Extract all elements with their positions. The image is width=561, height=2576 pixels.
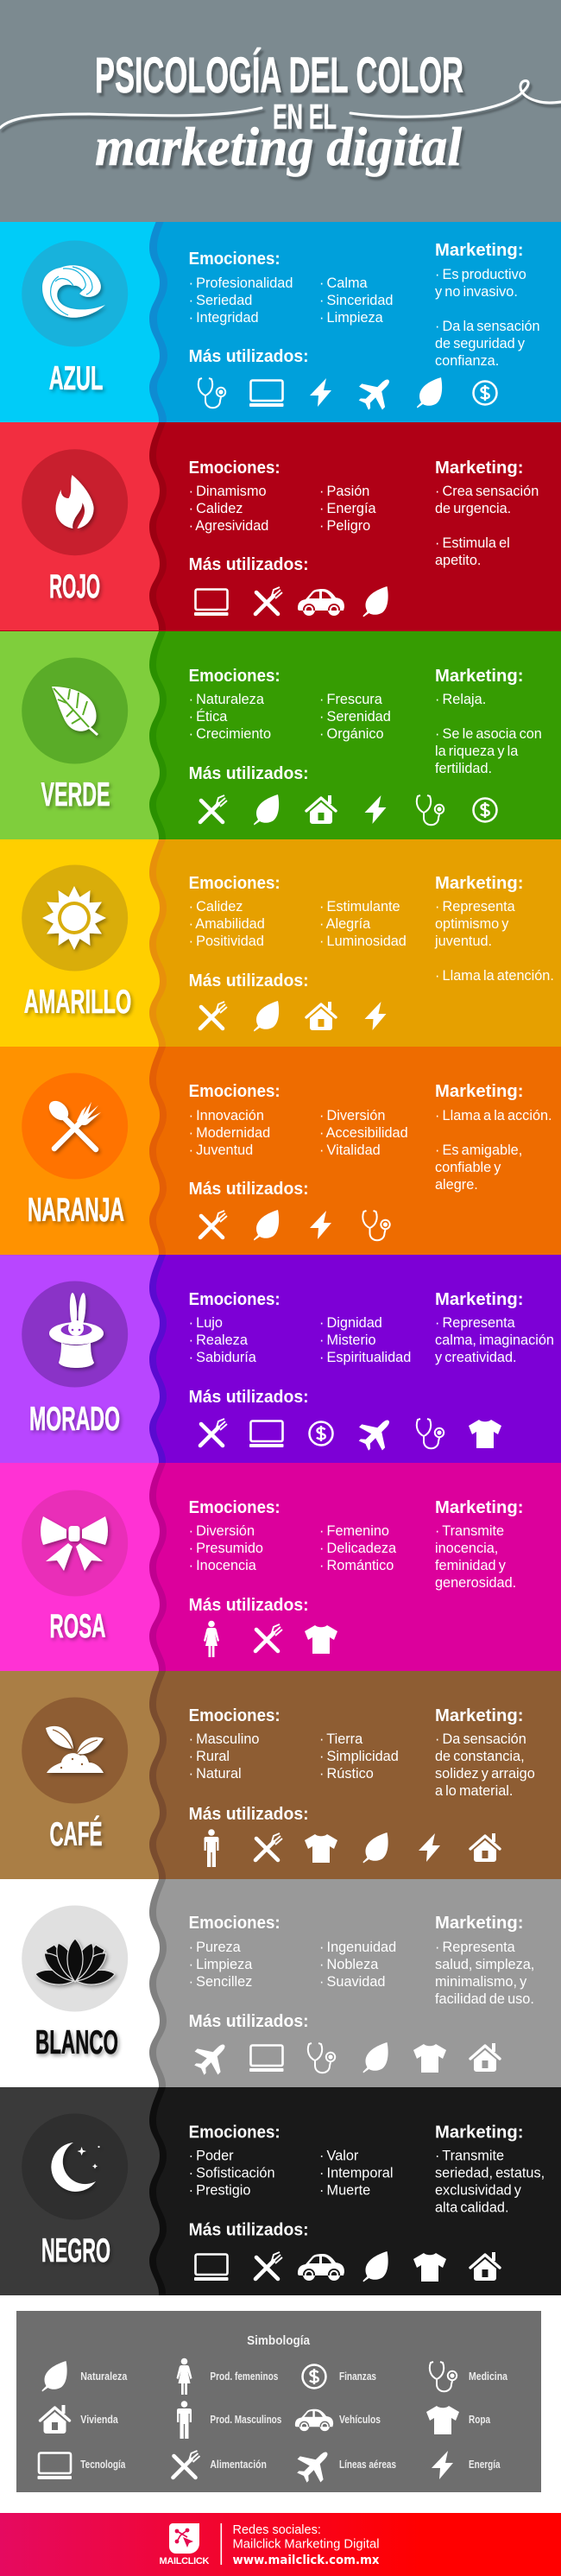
logo: mailclick [159,2523,210,2567]
legend: tecnologia: Tecnología [80,2459,126,2471]
marketing list: · Llama la atención. [435,968,554,984]
marketing list: · Estimula el [435,535,510,551]
emociones list: · Energía [319,501,377,516]
heading: emociones: Emociones: [189,1706,280,1725]
marketing list: · Da sensación [435,1731,526,1747]
emociones list [189,692,391,742]
white band below sections [0,2295,561,2513]
icons: mas utilizados [200,1409,501,1458]
marketing list: · Es amigable, [435,1142,522,1158]
marketing list: minimalismo, y [435,1974,527,1990]
icon: sombrero y conejo [49,1293,104,1368]
title: verde: VERDE [41,776,110,813]
emociones list: · Espiritualidad [319,1350,411,1365]
title line: en el: EN EL [273,97,337,136]
icon: loto [35,1939,116,1988]
legend: vivienda [40,2405,119,2434]
marketing list: · Crea sensación [435,484,539,499]
emociones list: · Ingenuidad [319,1940,396,1955]
emociones list: · Intemporal [319,2166,393,2181]
panel: naranja [0,1047,561,1255]
panel: negro [0,2087,561,2295]
emociones list: · Positividad [189,934,264,949]
emociones list: · Sabiduría [189,1350,257,1365]
icon: sol [42,886,106,950]
legend: medicina: Medicina [469,2370,508,2383]
panel: blanco [0,1879,561,2087]
heading: emociones: Emociones: [189,1290,280,1309]
emociones list: · Innovación [189,1108,264,1123]
emociones list: · Romántico [319,1558,394,1573]
heading: marketing: Marketing: [435,1914,523,1933]
heading: marketing: Marketing: [435,1498,523,1517]
legend: medicina [430,2362,508,2391]
icons: mas utilizados [200,1210,390,1240]
legend: energia: Energía [469,2459,501,2471]
title: naranja: NARANJA [28,1192,124,1229]
emociones list: · Naturaleza [189,692,265,707]
emociones list: · Simplicidad [319,1749,399,1764]
emociones list [189,484,377,534]
marketing list [434,899,554,984]
emociones list: · Inocencia [189,1558,257,1573]
emociones list: · Frescura [319,692,383,707]
panel: azul [0,214,561,422]
heading: emociones: Emociones: [189,667,280,686]
marketing list [435,1731,535,1799]
emociones list [189,2149,393,2199]
marketing list: salud, simpleza, [435,1957,534,1972]
heading: mas utilizados: Más utilizados: [189,1388,309,1407]
emociones list: · Dignidad [319,1315,382,1331]
heading: emociones: Emociones: [189,2123,280,2142]
emociones list: · Pasión [319,484,369,499]
icons: mas utilizados [187,2034,500,2082]
marketing list: · Se le asocia con [435,726,542,742]
marketing list [435,484,539,568]
legend: prod femeninos [176,2358,278,2395]
emociones list: · Limpieza [319,310,384,326]
emociones list [189,1523,397,1573]
panel: simbologia [16,2311,541,2492]
icon: moño [41,1516,108,1571]
heading: mas utilizados: Más utilizados: [189,2221,309,2240]
marketing list: · Da la sensación [435,319,540,334]
icon: fuego [55,475,94,528]
footer: mailclick marketing digital: Mailclick Marketing Digital [233,2537,380,2551]
panel: morado [0,1255,561,1463]
emociones list: · Orgánico [319,726,384,742]
marketing list: de seguridad y [435,336,526,351]
emociones list: · Natural [189,1766,242,1782]
marketing list: · Transmite [435,1523,504,1539]
marketing list: confianza. [435,353,499,369]
panel: cafe [0,1671,561,1879]
title line: marketing digital: marketing digital [95,116,462,177]
legend: alimentacion [173,2451,267,2478]
emociones list: · Femenino [319,1523,389,1539]
icon: cuchara y tenedor [45,1097,101,1149]
emociones list: · Crecimiento [189,726,271,742]
heading: emociones: Emociones: [189,1498,280,1517]
emociones list: · Sencillez [189,1974,252,1990]
heading: marketing: Marketing: [435,1706,523,1725]
emociones list [189,899,407,949]
legend: energia [432,2451,501,2479]
legend: prod masculinos [177,2401,281,2439]
emociones list: · Modernidad [189,1125,270,1141]
logo: mailclick: MAILCLICK [159,2556,210,2567]
marketing list: · Representa [435,1315,516,1331]
emociones list [189,1108,408,1158]
emociones list: · Peligro [319,518,370,534]
marketing list: · Representa [435,899,516,915]
footer [0,2513,561,2576]
emociones list: · Sofisticación [189,2166,275,2181]
header title [0,47,561,177]
heading: marketing: Marketing: [435,459,523,478]
marketing list [435,692,542,776]
heading: emociones: Emociones: [189,1914,280,1933]
legend: lineas aereas: Líneas aéreas [339,2459,396,2471]
title: cafe: CAFÉ [50,1815,102,1853]
marketing list [435,1940,534,2007]
marketing list: fertilidad. [435,761,492,776]
heading: mas utilizados: Más utilizados: [189,972,309,991]
heading: emociones: Emociones: [189,1082,280,1101]
marketing list: · Llama a la acción. [435,1108,552,1123]
legend: ropa [426,2406,491,2434]
legend: vivienda: Vivienda [80,2414,119,2426]
emociones list: · Alegría [319,916,371,932]
heading: mas utilizados: Más utilizados: [189,1180,309,1199]
heading: mas utilizados: Más utilizados: [189,555,309,574]
emociones list: · Ética [189,708,228,725]
emociones list: · Lujo [189,1315,223,1331]
heading: emociones: Emociones: [189,459,280,478]
marketing list [435,1523,516,1591]
panel: amarillo [0,839,561,1047]
emociones list: · Limpieza [189,1957,253,1972]
emociones list: · Diversión [319,1108,385,1123]
legend: vehiculos: Vehículos [339,2414,381,2426]
marketing list: alta calidad. [435,2200,509,2216]
marketing list: feminidad y [435,1558,507,1573]
marketing list: confiable y [435,1160,501,1175]
icon: luna [51,2142,100,2192]
legend: finanzas: Finanzas [339,2370,376,2383]
marketing list: y creatividad. [435,1350,517,1365]
heading: marketing: Marketing: [435,1082,523,1101]
heading: marketing: Marketing: [435,667,523,686]
emociones list: · Poder [189,2149,234,2164]
icons: mas utilizados [200,794,497,826]
emociones list: · Delicadeza [319,1541,397,1556]
swash right [350,81,561,117]
heading: mas utilizados: Más utilizados: [189,2012,309,2031]
emociones list: · Realeza [189,1332,249,1348]
title: negro: NEGRO [41,2232,110,2269]
marketing list: a lo material. [435,1783,513,1799]
emociones list: · Calidez [189,899,243,915]
title: rosa: ROSA [50,1608,105,1645]
heading: emociones: Emociones: [189,250,280,269]
emociones list [189,1315,411,1365]
marketing list [435,1315,554,1365]
footer: url: www.mailclick.com.mx [233,2554,380,2567]
title: rojo: ROJO [49,568,100,605]
marketing list: facilidad de uso. [435,1991,534,2007]
marketing list: apetito. [435,553,481,568]
emociones list: · Misterio [319,1332,376,1348]
emociones list: · Diversión [189,1523,255,1539]
marketing list: generosidad. [435,1575,516,1591]
emociones list: · Calidez [189,501,243,516]
panel: rosa [0,1463,561,1671]
heading: mas utilizados: Más utilizados: [189,764,309,783]
emociones list: · Estimulante [319,899,400,915]
heading: marketing: Marketing: [435,1290,523,1309]
marketing list: · Es productivo [435,267,526,282]
legend: finanzas [302,2364,376,2389]
title: blanco: BLANCO [35,2024,118,2061]
emociones list [189,275,393,326]
marketing list: calma, imaginación [435,1332,554,1348]
emociones list: · Sinceridad [319,293,393,308]
emociones list: · Amabilidad [189,916,265,932]
marketing list: exclusividad y [435,2183,522,2199]
marketing list: alegre. [435,1177,478,1193]
legend: prod masculinos: Prod. Masculinos [210,2414,281,2426]
emociones list: · Accesibilidad [319,1125,408,1141]
marketing list: inocencia, [435,1541,498,1556]
icons: mas utilizados [199,369,497,417]
emociones list: · Presumido [189,1541,263,1556]
heading: mas utilizados: Más utilizados: [189,1596,309,1615]
legend: alimentacion: Alimentación [210,2459,267,2471]
emociones list: · Masculino [189,1731,259,1747]
legend: tecnologia [38,2453,126,2479]
emociones list [189,1731,399,1782]
swash left [0,108,262,128]
emociones list: · Tierra [319,1731,363,1747]
legend: prod femeninos: Prod. femeninos [210,2370,278,2383]
emociones list: · Prestigio [189,2183,250,2199]
emociones list: · Rural [189,1749,230,1764]
heading: marketing: Marketing: [435,241,523,260]
emociones list: · Integridad [189,310,259,326]
emociones list: · Muerte [319,2183,370,2199]
title: morado: MORADO [29,1401,120,1438]
heading: marketing: Marketing: [435,2123,523,2142]
icons: mas utilizados [194,586,388,617]
marketing list: de urgencia. [435,501,511,516]
marketing list [435,267,540,369]
legend: naturaleza: Naturaleza [80,2370,128,2383]
icon: hoja [52,687,98,736]
legend: vehiculos [295,2409,381,2431]
emociones list: · Calma [319,275,369,291]
footer: redes sociales: Redes sociales: [233,2523,321,2537]
emociones list: · Pureza [189,1940,242,1955]
marketing list: seriedad, estatus, [435,2166,545,2181]
marketing list [435,1108,552,1193]
marketing list: la riqueza y la [435,744,519,759]
emociones list: · Valor [319,2149,359,2164]
title: amarillo: AMARILLO [24,984,131,1021]
icons: mas utilizados [204,1829,500,1867]
marketing list: de constancia, [435,1749,525,1764]
icons: mas utilizados [200,1001,387,1031]
emociones list: · Dinamismo [189,484,267,499]
emociones list: · Rústico [319,1766,374,1782]
marketing list: solidez y arraigo [435,1766,535,1782]
emociones list: · Juventud [189,1142,253,1158]
emociones list: · Suavidad [319,1974,385,1990]
icon: brote [46,1726,104,1773]
emociones list: · Luminosidad [319,934,407,949]
emociones list: · Nobleza [319,1957,379,1972]
marketing list: y no invasivo. [435,284,518,300]
panel: verde [0,631,561,839]
marketing list: · Relaja. [435,692,486,707]
heading: mas utilizados: Más utilizados: [189,347,309,366]
heading: mas utilizados: Más utilizados: [189,1805,309,1824]
emociones list: · Agresividad [189,518,268,534]
marketing list [435,2149,545,2216]
panel: rojo [0,422,561,631]
emociones list: · Serenidad [319,709,391,725]
heading: emociones: Emociones: [189,874,280,893]
emociones list: · Profesionalidad [189,275,293,291]
heading: simbologia: Simbología [247,2334,311,2348]
legend: lineas aereas [290,2441,396,2490]
marketing list: · Representa [435,1940,516,1955]
legend: ropa: Ropa [469,2414,491,2426]
emociones list [189,1940,396,1990]
emociones list: · Vitalidad [319,1142,381,1158]
divider [221,2523,222,2565]
icon: ola [42,265,105,318]
marketing list: · Transmite [435,2149,504,2164]
emociones list: · Seriedad [189,293,252,308]
marketing list: juventud. [434,934,492,949]
title: azul: AZUL [49,360,103,397]
legend: naturaleza [41,2361,128,2392]
marketing list: optimismo y [435,916,509,932]
header background [0,0,561,222]
icons: mas utilizados [194,2251,500,2282]
icons: mas utilizados [204,1621,337,1657]
heading: marketing: Marketing: [435,874,523,893]
